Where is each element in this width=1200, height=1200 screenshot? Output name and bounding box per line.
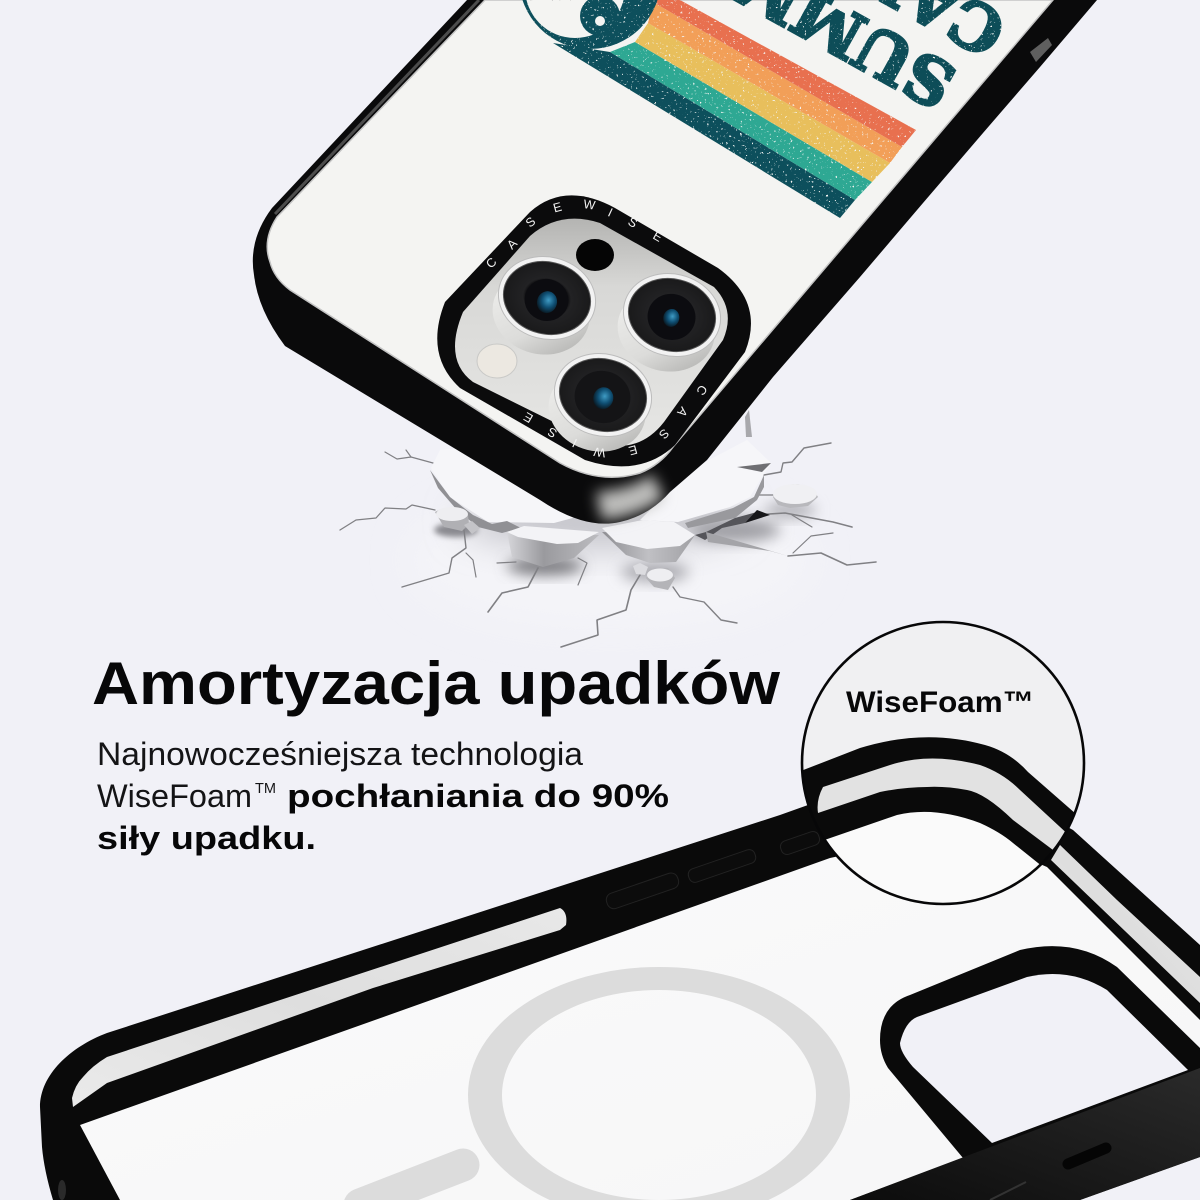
left side hole (58, 1180, 66, 1200)
body text: siły upadku. (97, 820, 316, 856)
case frame silhouette (40, 775, 1200, 1200)
stripe: red (653, 0, 916, 147)
floor highlight and shadow (410, 490, 816, 630)
circle outline (802, 622, 1084, 904)
circle label: WiseFoam™ (846, 686, 1034, 719)
stripe: teal (610, 42, 872, 200)
band port cutout (1068, 1148, 1106, 1164)
white back panel (267, 0, 1053, 477)
camera cutout opening (900, 974, 1188, 1143)
magnified frame detail (804, 737, 1074, 864)
magnified interior (826, 812, 1040, 903)
broken floor plates (430, 410, 818, 590)
side port (779, 830, 821, 856)
bottom open case (40, 775, 1200, 1200)
lens three (540, 343, 660, 462)
side button sheen (1030, 38, 1052, 62)
cracked floor impact (340, 410, 876, 647)
band button (990, 1182, 1026, 1200)
case interior (80, 830, 1200, 1200)
camera plate (455, 219, 728, 446)
lens two (609, 263, 729, 382)
WiseFoam magnifier circle (800, 620, 1086, 906)
crack lines (340, 443, 876, 647)
body text: pochłaniania do 90% (287, 778, 669, 814)
magsafe alignment bar (360, 1165, 463, 1200)
black bumper (253, 0, 1097, 524)
power button (687, 848, 757, 884)
foam strip right (1051, 845, 1200, 1003)
magnified foam (818, 758, 1065, 850)
flash (477, 344, 517, 378)
body text: WiseFoam (97, 778, 252, 814)
magnified black frame (804, 737, 1074, 864)
retro rainbow print (519, 0, 1018, 218)
print lettering (732, 0, 1002, 107)
camera bump (437, 195, 751, 466)
bottom side band (850, 1068, 1200, 1200)
vinyl record sun (519, 0, 661, 49)
foam strip left (72, 908, 566, 1107)
body text: TM (255, 780, 276, 797)
lidar sensor (576, 239, 614, 271)
lens one (484, 246, 604, 365)
camera cutout frame (880, 946, 1200, 1158)
bumper highlight (596, 474, 664, 520)
edge sheen (275, 0, 479, 214)
body text: Najnowocześniejsza technologia (97, 736, 583, 772)
top phone in Casewise case (253, 0, 1097, 524)
camera ring (437, 195, 751, 466)
volume button (604, 871, 681, 911)
magsafe ring (468, 967, 850, 1200)
stripe: yellow (635, 23, 890, 182)
stripe: dark teal (553, 43, 855, 218)
ring text bottom: CASEWISE (521, 382, 710, 460)
body text (97, 736, 669, 856)
stripe: orange (648, 2, 902, 163)
heading: Amortyzacja upadków (92, 650, 780, 717)
ring text top: CASEWISE (483, 197, 665, 271)
